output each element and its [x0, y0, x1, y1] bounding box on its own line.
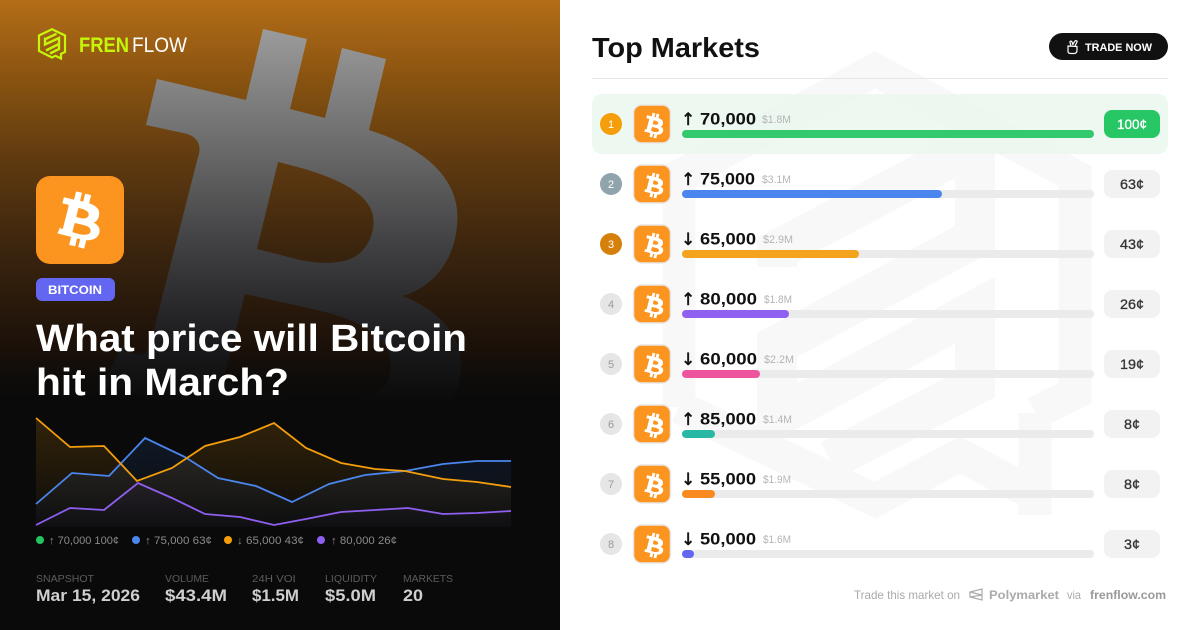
row 7: 7 [608, 479, 614, 491]
stats row: MARKETS [403, 574, 453, 585]
row 5: 5 [608, 359, 614, 371]
row 8 [600, 525, 1160, 563]
row 6: 8¢ [1124, 417, 1140, 432]
row 4 [600, 285, 1160, 323]
row 6: ↑ [681, 410, 695, 430]
footer attribution: Trade this market on [854, 588, 960, 602]
row 8: $1.6M [763, 534, 791, 546]
row 6 [600, 405, 1160, 443]
row 3 [600, 225, 1160, 263]
row 7: $1.9M [763, 474, 791, 486]
logo watermark [679, 70, 1075, 515]
header title: Top Markets [592, 32, 760, 63]
row 1: 1 [608, 119, 614, 131]
wordmark: FLOW [132, 34, 187, 57]
row 8: 8 [608, 539, 614, 551]
stats row: $1.5M [252, 586, 299, 605]
row 4: ↑ [681, 290, 695, 310]
chart legend: ↑ 75,000 63¢ [145, 535, 212, 547]
icon: frenflow hexagon [39, 29, 65, 58]
divider [592, 78, 1168, 79]
row 8: 3¢ [1124, 537, 1140, 552]
line chart [36, 418, 511, 527]
footer attribution: Polymarket [989, 588, 1059, 602]
chart legend: ↑ 70,000 100¢ [49, 535, 119, 547]
row 1: ↑ [681, 110, 695, 130]
stats row: 20 [403, 586, 423, 605]
icon: large bitcoin watermark [103, 29, 461, 516]
trade now button [1049, 33, 1168, 60]
stats row [36, 574, 453, 605]
row 5: 60,000 [700, 350, 757, 368]
footer attribution [854, 588, 1166, 602]
row 7: 8¢ [1124, 477, 1140, 492]
row 8: ↓ [681, 530, 695, 550]
chart legend: ↓ 65,000 43¢ [237, 535, 304, 547]
row 3: 43¢ [1120, 237, 1144, 252]
category badge [36, 278, 115, 301]
footer attribution: frenflow.com [1090, 588, 1166, 602]
stats row: SNAPSHOT [36, 574, 94, 585]
row 5: $2.2M [764, 354, 794, 366]
row 2: 2 [608, 179, 614, 191]
row 3: $2.9M [763, 234, 793, 246]
stats row: Mar 15, 2026 [36, 586, 140, 605]
wordmark: FREN [79, 34, 129, 57]
row 2: $3.1M [762, 174, 791, 186]
row 7 [600, 465, 1160, 503]
category badge: BITCOIN [48, 283, 102, 297]
row 2 [600, 165, 1160, 203]
row 7: ↓ [681, 470, 695, 490]
row 7: 55,000 [700, 470, 756, 488]
row 3: 3 [608, 239, 614, 251]
stats row: $43.4M [165, 586, 227, 605]
icon: bitcoin tile [36, 176, 124, 264]
row 3: 65,000 [700, 230, 756, 248]
row 6: $1.4M [763, 414, 792, 426]
row 2: 63¢ [1120, 177, 1144, 192]
row 6: 6 [608, 419, 614, 431]
stats row: $5.0M [325, 586, 376, 605]
row 5: 19¢ [1120, 357, 1144, 372]
row 2: 75,000 [700, 170, 755, 188]
brand logo [39, 29, 187, 58]
stats row: VOLUME [165, 574, 209, 585]
row 1 [592, 94, 1168, 154]
row 1: 100¢ [1117, 117, 1147, 132]
title: What price will Bitcoin [36, 318, 467, 360]
row 3: ↓ [681, 230, 695, 250]
stats row: 24H VOL [252, 574, 299, 585]
icon: polymarket [970, 589, 982, 600]
panel: top markets [560, 0, 1200, 630]
trade now button: TRADE NOW [1085, 42, 1153, 54]
row 4: $1.8M [764, 294, 792, 306]
row 1: 70,000 [700, 110, 756, 128]
row 1: $1.8M [762, 114, 791, 126]
chart legend: ↑ 80,000 26¢ [331, 535, 397, 547]
panel: left hero [0, 0, 560, 630]
footer attribution: via [1067, 588, 1081, 602]
chart legend [36, 535, 397, 547]
row 6: 85,000 [700, 410, 756, 428]
title: hit in March? [36, 362, 289, 404]
row 4: 4 [608, 299, 614, 311]
row 4: 80,000 [700, 290, 757, 308]
row 2: ↑ [681, 170, 695, 190]
row 8: 50,000 [700, 530, 756, 548]
row 5: ↓ [681, 350, 695, 370]
row 5 [600, 345, 1160, 383]
row 4: 26¢ [1120, 297, 1144, 312]
stats row: LIQUIDITY [325, 574, 377, 585]
